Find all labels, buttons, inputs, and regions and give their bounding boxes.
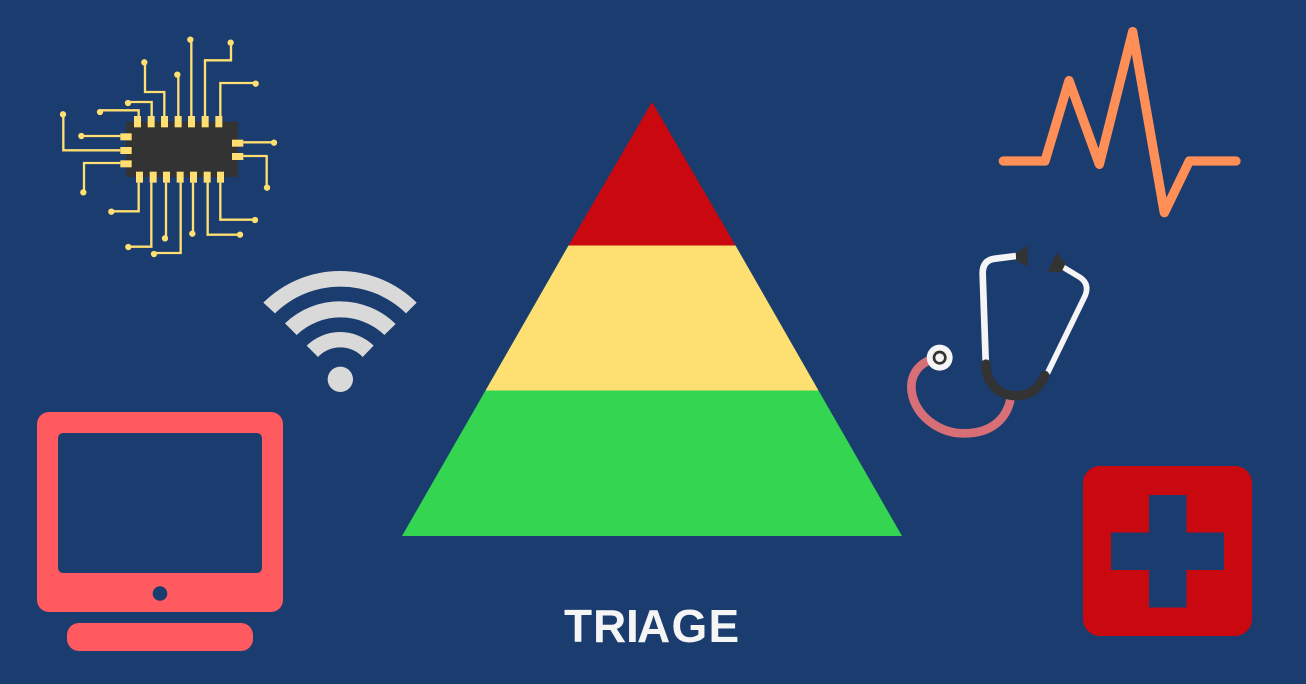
icon: computer monitor xyxy=(37,412,283,651)
icon: circuit chip xyxy=(60,36,277,257)
icon: heartbeat line xyxy=(1003,32,1236,213)
monitor stand xyxy=(67,623,253,651)
icon: medical cross xyxy=(1083,466,1252,636)
pyramid tier: red xyxy=(568,102,736,246)
monitor body xyxy=(37,412,283,612)
pyramid tier: green xyxy=(402,390,902,536)
title: TRIAGE xyxy=(564,600,739,652)
icon: stethoscope xyxy=(911,246,1087,433)
pyramid tier: yellow xyxy=(486,246,818,390)
triage pyramid xyxy=(402,102,902,536)
icon: wifi xyxy=(263,271,417,392)
